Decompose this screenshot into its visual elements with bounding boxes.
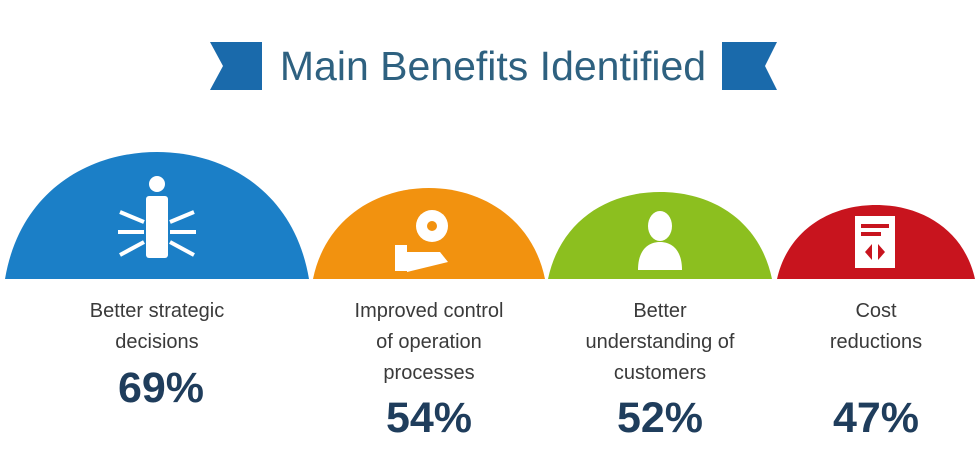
label: col2 [355, 300, 503, 384]
label: col1 [90, 300, 224, 353]
icon: customer [638, 211, 682, 270]
label: col3: Better [633, 300, 687, 322]
label: col2: processes [383, 362, 475, 384]
label: col1: Better strategic [90, 300, 224, 322]
label: col3: understanding of [585, 331, 734, 353]
label: col3 [585, 300, 734, 384]
icon: document [855, 216, 895, 268]
title banner [210, 42, 777, 90]
icon: person with arrows [118, 176, 196, 258]
domes chart [5, 152, 975, 279]
percent: 47%: 47% [833, 394, 919, 442]
label: col4: Cost [855, 300, 897, 322]
icon: left ribbon [210, 42, 262, 90]
percent: 69%: 69% [118, 364, 204, 412]
label: col3: customers [614, 362, 706, 384]
dome: red [777, 205, 975, 279]
label: col1: decisions [115, 331, 199, 353]
dome: blue [5, 152, 309, 279]
label: col2: Improved control [355, 300, 503, 322]
percent: 52%: 52% [617, 394, 703, 442]
dome: orange [313, 188, 545, 279]
percent: 54%: 54% [386, 394, 472, 442]
icon: gear in hand [395, 210, 448, 272]
label: col4: reductions [830, 331, 922, 353]
label: col2: of operation [376, 331, 482, 353]
label: col4 [830, 300, 922, 353]
icon: right ribbon [722, 42, 777, 90]
title text: Main Benefits Identified [280, 43, 706, 89]
dome: green [548, 192, 772, 279]
